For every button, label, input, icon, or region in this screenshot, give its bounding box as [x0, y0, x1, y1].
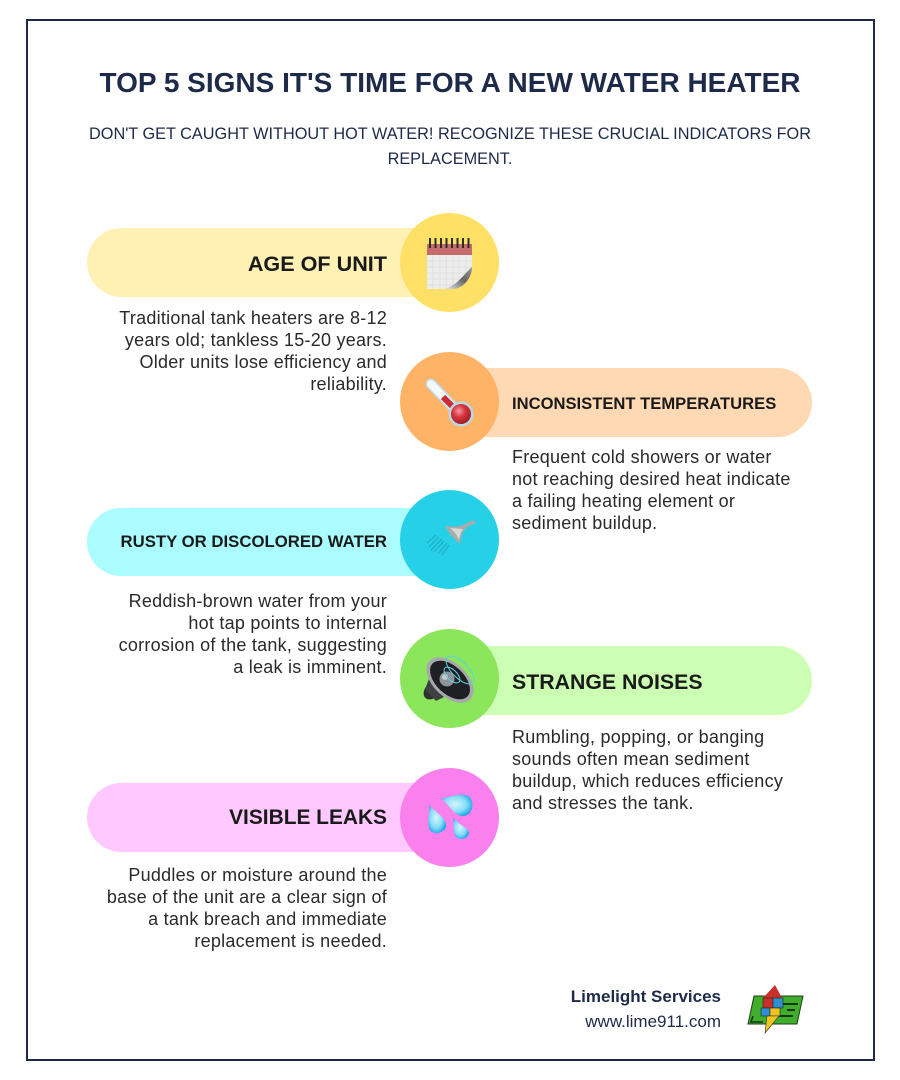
text: inconsistent temperatures: Frequent cold showers or water: [512, 447, 772, 467]
panel: age of unit: [87, 213, 499, 394]
panel: rusty or discolored water: [87, 490, 499, 677]
text: strange noises: [512, 727, 783, 813]
header pill: age of unit: [87, 228, 467, 297]
text: visible leaks: Puddles or moisture around the: [128, 865, 387, 885]
icon circle: thermometer: [400, 352, 499, 451]
text: rusty water: [119, 591, 387, 677]
text: inconsistent temperatures: [512, 447, 791, 533]
heading: inconsistent temperatures: INCONSISTENT TEMPERATURES: [512, 394, 776, 413]
text: age of unit: reliability.: [310, 374, 387, 394]
text: age of unit: [119, 308, 387, 394]
header pill: rusty water: [87, 508, 467, 576]
icon: LS logo: [747, 985, 804, 1034]
icon circle: calendar: [400, 213, 499, 312]
text: inconsistent temperatures: sediment buildup.: [512, 513, 657, 533]
header pill: inconsistent temperatures: [432, 368, 812, 437]
text: rusty water: a leak is imminent.: [233, 657, 387, 677]
text: strange noises: buildup, which reduces efficiency: [512, 771, 783, 791]
icon circle: droplets: [400, 768, 499, 867]
heading: strange noises: STRANGE NOISES: [512, 670, 703, 694]
website: www.lime911.com: [585, 1012, 721, 1031]
text: strange noises: Rumbling, popping, or banging: [512, 727, 764, 747]
text: strange noises: sounds often mean sediment: [512, 749, 750, 769]
text: rusty water: Reddish-brown water from your: [129, 591, 387, 611]
panel: visible leaks: [87, 768, 499, 951]
icon: thermometer: [426, 378, 474, 426]
panel: strange noises: [400, 629, 812, 813]
header pill: visible leaks: [87, 783, 467, 852]
header pill: strange noises: [432, 646, 812, 715]
icon circle: shower head: [400, 490, 499, 589]
text: visible leaks: [107, 865, 387, 951]
heading: visible leaks: VISIBLE LEAKS: [229, 806, 387, 829]
subtitle: DON'T GET CAUGHT WITHOUT HOT WATER! RECOGNIZE THESE CRUCIAL INDICATORS FOR: [89, 125, 811, 143]
text: inconsistent temperatures: a failing heating element or: [512, 491, 735, 511]
text: visible leaks: base of the unit are a clear sign of: [107, 887, 387, 907]
text: strange noises: and stresses the tank.: [512, 793, 694, 813]
text: visible leaks: a tank breach and immediate: [148, 909, 387, 929]
text: age of unit: Traditional tank heaters are 8-12: [119, 308, 387, 328]
icon circle: speaker: [400, 629, 499, 728]
title: TOP 5 SIGNS IT'S TIME FOR A NEW WATER HEATER: [100, 67, 800, 98]
text: age of unit: Older units lose efficiency and: [139, 352, 387, 372]
icon: droplets: [428, 794, 472, 839]
text: rusty water: corrosion of the tank, suggesting: [119, 635, 387, 655]
text: rusty water: hot tap points to internal: [188, 613, 387, 633]
brand name: Limelight Services: [571, 987, 721, 1006]
text: age of unit: years old; tankless 15-20 years.: [125, 330, 387, 350]
icon: calendar: [427, 238, 472, 289]
subtitle: REPLACEMENT.: [388, 150, 512, 168]
subtitle: [89, 125, 811, 168]
text: inconsistent temperatures: not reaching desired heat indicate: [512, 469, 791, 489]
heading: rusty water: RUSTY OR DISCOLORED WATER: [121, 532, 387, 551]
panel: inconsistent temperatures: [400, 352, 812, 533]
heading: age of unit: AGE OF UNIT: [248, 251, 387, 276]
footer brand: [571, 985, 804, 1034]
icon: shower head: [426, 520, 476, 556]
text: visible leaks: replacement is needed.: [194, 931, 387, 951]
icon: speaker: [424, 656, 474, 703]
